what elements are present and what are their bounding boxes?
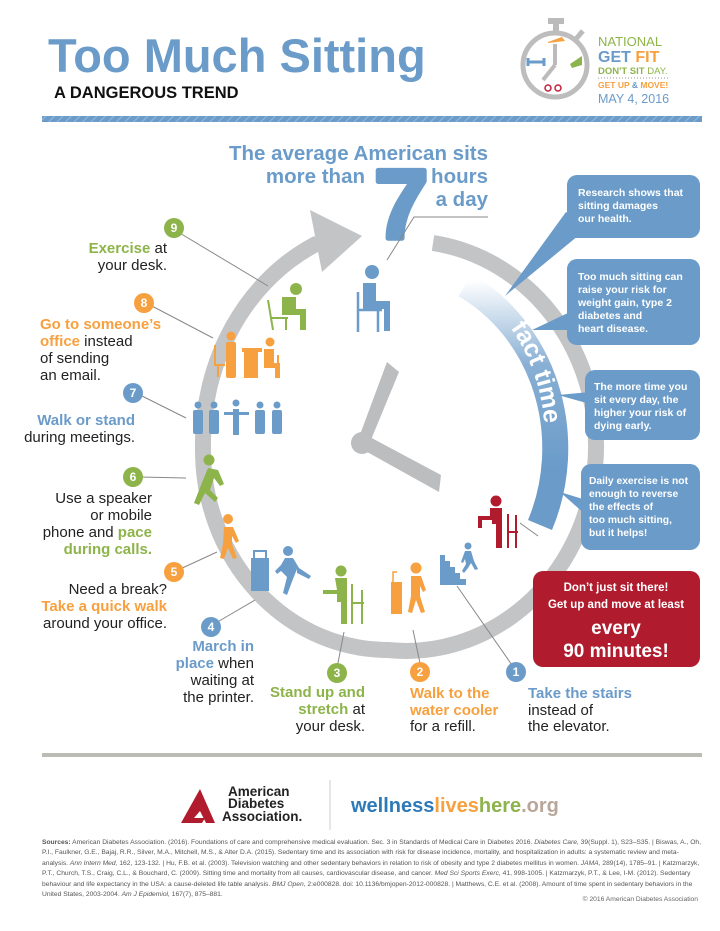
callout: move every 90 minutes: every [591,618,641,639]
tip 7 text: Walk or stand [37,412,135,429]
icon: stretching red [478,496,518,548]
headline: average American sits 7 hours: a day [436,188,489,211]
logo: American Diabetes Association: American [228,784,290,799]
callout: research shows [505,175,700,296]
callout: raise risk [532,259,700,345]
icon: meeting at office [215,332,280,378]
number badges: 5 [171,565,178,579]
tip 3 text [270,684,366,735]
logo: American Diabetes Association [181,784,302,824]
callout: dying early: sit every day, the [594,394,679,406]
tip 1 text [528,685,632,735]
tip 4 text: place when [176,655,254,672]
tip 7 text [24,412,135,446]
tip 7 text: during meetings. [24,429,135,446]
logo: American Diabetes Association: Association. [222,809,302,824]
tip 8 text: Go to someone’s [40,316,161,333]
callout: move every 90 minutes: Don’t just sit there! [564,582,668,594]
callout: move every 90 minutes: Get up and move at least [548,599,684,611]
tip 8 text: of sending [40,350,109,367]
headline: average American sits 7 hours: The average American sits [229,142,488,165]
icon: exercise at desk [268,283,306,330]
tip 4 text: the printer. [183,689,254,706]
tip 4 text: March in [192,638,254,655]
headline: average American sits 7 hours: hours [431,165,488,188]
number badges: 8 [141,296,148,310]
logo: national get fit day: GET UP & MOVE! [598,80,668,90]
tip 1 text: instead of [528,702,594,719]
tip 2 text: water cooler [409,702,499,719]
number badges: 1 [513,665,520,679]
tip 2 text: Walk to the [410,685,489,702]
number badges: 3 [334,666,341,680]
tip 3 text: your desk. [296,718,365,735]
tip 9 text [89,240,168,274]
subtitle: A DANGEROUS TREND [54,84,239,102]
icon: stretch at desk [323,566,364,624]
icon: water cooler and walker [391,562,426,614]
icon: group standing meeting [193,400,282,435]
icon: walking on phone [194,454,224,505]
callout: dying early: The more time you [594,381,687,393]
logo: national get fit day: NATIONAL [598,34,662,49]
headline: average American sits 7 hours: more than [266,165,365,188]
callout: dying early: dying early. [594,420,652,432]
tip 6 text: phone and pace [43,524,152,541]
tip 1 text: Take the stairs [528,685,632,702]
callout: raise risk: heart disease. [578,323,648,335]
icon: seated person [358,265,390,332]
number badges: 7 [130,386,137,400]
logo: national get fit day: DON'T SIT DAY. [598,66,667,77]
sources text: Sources: American Diabetes Association. (2016). Foundations of care and comprehensive medical evaluation. Sec. 3 in Standards of Medical Care in Diabetes 2016. Diabetes Care, 39(Suppl. 1), S23–S35. | Biswas, A., Oh, P.I., Faulkner, G.E., Bajaj, R.R., Silver, M.A., Mitchell, M.S., & Alter D.A. (2015). Sedentary time and its association with risk for disease incidence, mortality, and hospitalization in adults: a systematic review and meta-analysis. Ann Intern Med, 162, 123-132. | Hu, F.B. et al. (2003). Television watching and other sedentary behaviors in relation to risk of obesity and type 2 diabetes mellitus in women. JAMA, 289(14), 1785–91. | Katzmarzyk, P.T., Church, T.S., Craig, C.L., & Bouchard, C. (2009). Sitting time and mortality from all causes, cardiovascular disease, and cancer. Med Sci Sports Exerc, 41, 998-1005. | Katzmarzyk, P.T., & Lee, I-M. (2012). Sedentary behaviour and life expectancy in the USA: a cause-deleted life table analysis. BMJ Open, 2:e000828. doi: 10.1136/bmjopen-2012-000828. | Matthews, C.E. et al. (2008). Amount of time spent in sedentary behaviors in the United States, 2003-2004. Am J Epidemiol, 167(7), 875–881. [42,839,701,898]
logo: national get fit day: GET FIT [598,49,660,66]
callout: move every 90 minutes [533,571,700,667]
headline: average American sits 7 hours [229,142,489,259]
number badges: 2 [417,665,424,679]
tip 8 text [40,316,161,384]
callout: dying early [558,370,700,440]
title: Too Much Sitting [48,29,426,82]
callout: dying early: higher your risk of [594,407,687,419]
copyright: © 2016 American Diabetes Association [583,896,698,903]
tip 1 text: the elevator. [528,718,610,735]
tip 5 text [41,581,168,632]
callout: research shows: Research shows that [578,187,684,199]
logo: American Diabetes Association: Diabetes [228,796,284,811]
callout: daily exercise: but it helps! [589,528,647,539]
tip 4 text: waiting at [190,672,255,689]
tip 6 text: or mobile [90,507,152,524]
clock hands [351,362,441,492]
tip 5 text: around your office. [43,615,167,632]
tip 8 text: an email. [40,367,101,384]
callout: daily exercise: the effects of [589,502,654,513]
icon: printer and marching [251,546,311,595]
tip 3 text: Stand up and [270,684,365,701]
number badges [123,218,526,683]
callout: raise risk: weight gain, type 2 [577,297,672,309]
callout: raise risk: diabetes and [578,310,642,322]
tip 6 text: Use a speaker [55,490,152,507]
fact time band: fact time [512,320,558,422]
number badges: 4 [208,620,215,634]
tip 6 text [43,490,152,558]
callout: daily exercise: Daily exercise is not [589,476,689,487]
leader lines [140,232,538,668]
callout: daily exercise [560,464,700,550]
tip 9 text: your desk. [98,257,167,274]
icon: stairs [440,542,478,585]
logo: national get fit day [523,18,669,106]
tip 9 text: Exercise at [89,240,168,257]
logo: national get fit day: MAY 4, 2016 [598,92,669,106]
callout: move every 90 minutes: 90 minutes! [563,641,669,662]
headline: average American sits 7 hours: 7 [374,149,429,259]
tip 2 text [409,685,499,735]
icon: quick walk [220,514,239,559]
clock ring with arrow [203,210,596,651]
fact time band [458,286,568,530]
callout: research shows: sitting damages [578,200,658,212]
tip 4 text [176,638,255,706]
number badges: 9 [171,221,178,235]
tip 5 text: Take a quick walk [41,598,168,615]
number badges: 6 [130,470,137,484]
tip 8 text: office instead [40,333,133,350]
website text: wellnessliveshere.org [350,795,559,817]
callout: raise risk: raise your risk for [578,284,667,296]
tip 3 text: stretch at [298,701,366,718]
tip 5 text: Need a break? [69,581,167,598]
callout: daily exercise: enough to reverse [589,489,679,500]
callout: raise risk: Too much sitting can [578,271,683,283]
callout: daily exercise: too much sitting, [589,515,672,526]
tip 6 text: during calls. [64,541,152,558]
tip 2 text: for a refill. [410,718,476,735]
callout: research shows: our health. [578,213,632,225]
